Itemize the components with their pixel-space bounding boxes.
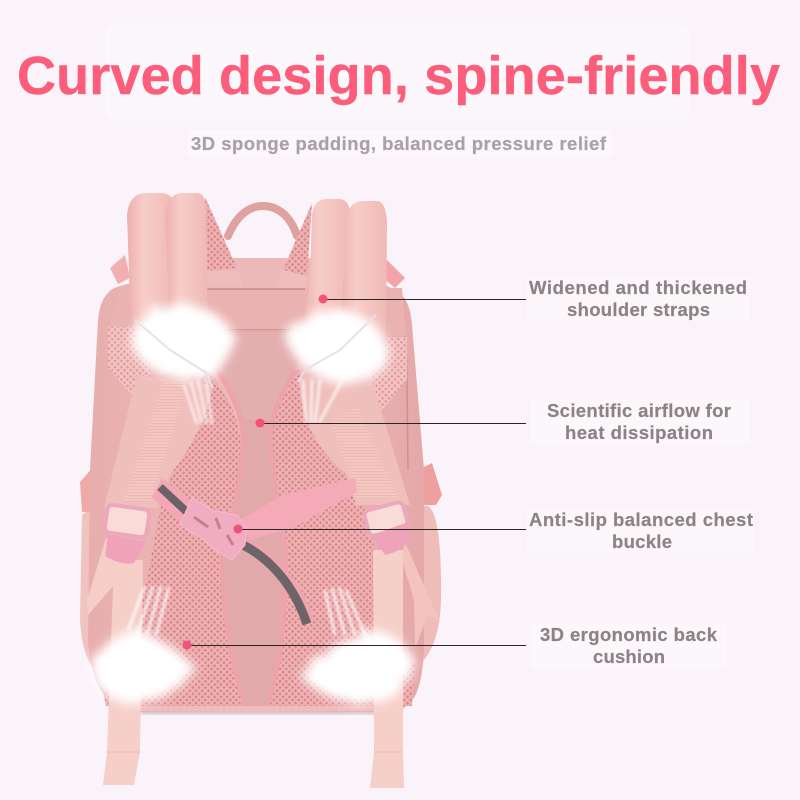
shoulder straps label: Widened and thickened (529, 277, 747, 298)
right side pocket (408, 505, 441, 670)
back cushion label (540, 624, 718, 667)
bottom trim (140, 706, 394, 711)
strap end seams (107, 751, 403, 753)
left adjuster buckle (104, 504, 150, 564)
chest buckle label: buckle (612, 531, 672, 552)
shoulder straps label panel (527, 277, 750, 321)
top seam (205, 289, 320, 330)
right adjuster buckle (363, 501, 411, 555)
left strap webbing (123, 377, 190, 502)
chest buckle (180, 497, 247, 560)
central back panel (218, 330, 296, 706)
right side clip (418, 463, 442, 505)
left long strap (103, 560, 143, 785)
airflow marker (256, 418, 264, 428)
zipper highlight left (135, 320, 213, 388)
right inner band (267, 370, 296, 706)
right shoulder pad outer hump (340, 201, 387, 340)
chest buckle marker (234, 524, 242, 534)
right strap padding (298, 370, 410, 505)
airflow label (547, 400, 731, 443)
right upper mesh pad (370, 337, 407, 412)
right inner mesh wing (283, 203, 312, 276)
right foam pad bottom (275, 270, 307, 288)
back cushion marker (182, 640, 192, 650)
subtitle: 3D sponge padding, balanced pressure relief (191, 133, 607, 154)
callout: shoulder straps (318, 277, 750, 321)
left shoulder pad inner hump (165, 193, 208, 335)
right shoulder pad inner hump (302, 199, 350, 340)
callout: airflow (256, 400, 750, 444)
subtitle panel (187, 130, 612, 157)
shoulder straps label: shoulder straps (567, 299, 710, 320)
airflow leader line (260, 422, 526, 424)
shoulder straps label (529, 277, 747, 320)
chest buckle label: Anti-slip balanced chest (529, 509, 753, 530)
chest buckle slots (194, 517, 233, 545)
left side clip (80, 465, 102, 512)
left reflective band (160, 487, 188, 513)
right strap webbing (330, 407, 400, 500)
callout: chest buckle (234, 509, 754, 553)
chest strap left (152, 478, 196, 526)
shoulder straps leader line (323, 298, 526, 300)
left inner mesh wing (205, 197, 237, 271)
left shoulder pad outer hump (127, 193, 175, 335)
white fluff lower right (300, 628, 416, 704)
airflow arrows lower right (325, 587, 365, 635)
chest strap right (240, 478, 357, 540)
white fluff upper left (130, 305, 236, 380)
left hip tail (87, 538, 114, 615)
shoulder straps marker (318, 294, 328, 304)
backpack illustration (80, 193, 442, 788)
back cushion label: 3D ergonomic back (540, 624, 718, 645)
left inner band (215, 366, 245, 706)
right body edge (398, 296, 408, 470)
left lower mesh pad (98, 368, 244, 706)
loose reflective core (232, 540, 307, 624)
loose strap edge (230, 538, 309, 622)
chest buckle label (529, 509, 753, 552)
left strap padding (104, 375, 213, 508)
top panel seam band (108, 288, 406, 336)
main body (88, 262, 424, 712)
central lens panel (222, 425, 286, 706)
chest buckle label panel (527, 509, 754, 553)
title panel (105, 25, 690, 120)
carry handle (228, 206, 297, 236)
callout: back cushion (182, 624, 727, 668)
airflow arrows upper left (184, 380, 212, 424)
left upper mesh pad (108, 327, 150, 415)
zipper highlight right (298, 315, 376, 382)
white fluff lower left (90, 630, 196, 704)
airflow label: heat dissipation (565, 422, 713, 443)
right long strap (370, 550, 404, 788)
white fluff upper right (284, 309, 390, 384)
back cushion label: cushion (593, 646, 665, 667)
title: Curved design, spine-friendly (17, 46, 780, 106)
airflow label panel (530, 400, 750, 444)
right lower mesh pad (266, 370, 415, 706)
left shoulder tab (110, 255, 130, 284)
right shoulder tab (382, 260, 405, 288)
chest buckle leader line (238, 528, 526, 530)
back cushion leader line (187, 644, 526, 646)
left side pocket (80, 507, 110, 672)
back cushion label panel (532, 624, 727, 668)
right hip tail (402, 540, 440, 648)
airflow arrows lower left (128, 586, 169, 635)
ground shadow (140, 709, 390, 714)
left foam pad bottom (205, 271, 244, 287)
top panel (205, 258, 312, 330)
airflow arrows upper right (303, 375, 345, 423)
upper central panel (215, 332, 300, 420)
airflow label: Scientific airflow for (547, 400, 731, 421)
